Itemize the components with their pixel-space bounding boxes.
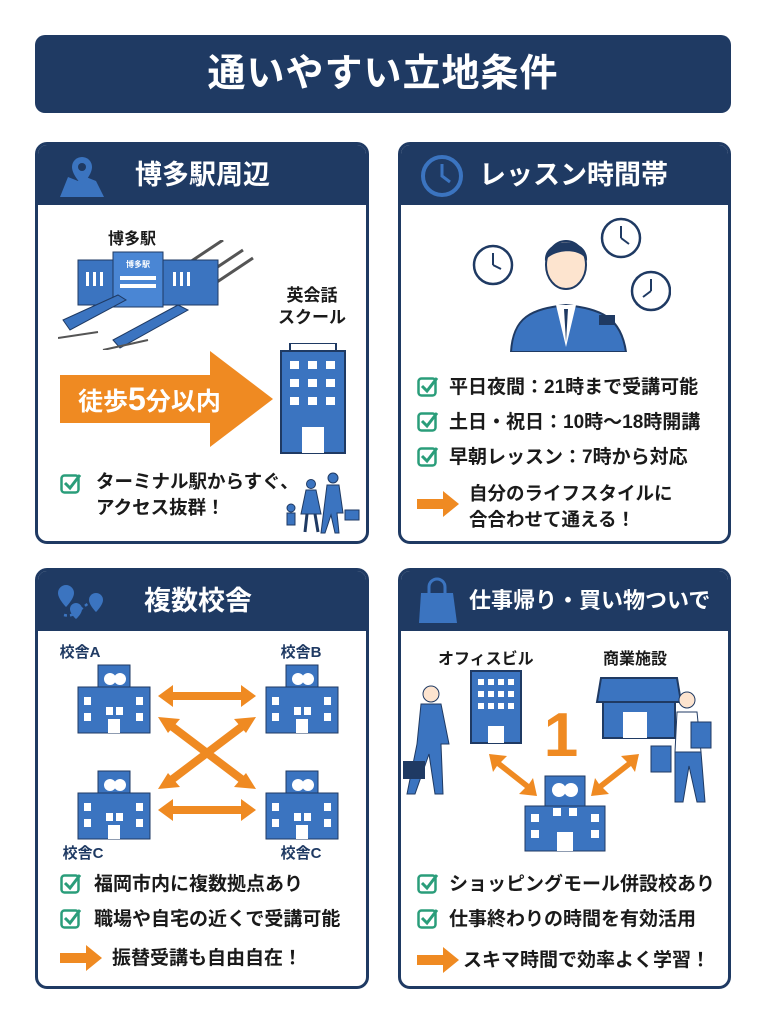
header: 博多駅周辺: 博多駅周辺 xyxy=(135,160,270,190)
icon: school building xyxy=(280,343,346,454)
header: レッスン時間帯: レッスン時間帯 xyxy=(479,160,668,190)
arrow callout: 自分のライフスタイルに xyxy=(469,483,673,504)
header: 仕事帰り・買い物ついで: 仕事帰り・買い物ついで xyxy=(469,588,710,613)
header: レッスン時間帯 xyxy=(401,145,728,205)
illustration: walking family xyxy=(286,472,360,534)
illustration: office, store, people, school: 1 xyxy=(544,701,578,770)
checklist: スキマ時間で効率よく学習！ xyxy=(463,950,710,971)
checklist: 仕事終わりの時間を有効活用 xyxy=(449,909,696,930)
labels: オフィスビル xyxy=(438,651,534,668)
checklist xyxy=(60,874,340,971)
checklist: 福岡市内に複数拠点あり xyxy=(94,874,303,895)
label: 英会話スクール xyxy=(278,286,346,327)
checklist: 平日夜間：21時まで受講可能 xyxy=(449,377,698,398)
panel: 複数校舎 xyxy=(35,568,369,989)
checklist xyxy=(417,874,715,973)
panel: レッスン時間帯 xyxy=(398,142,731,544)
campus buildings and arrows xyxy=(60,643,338,862)
arrow callout xyxy=(417,483,673,530)
checklist item xyxy=(60,471,299,518)
panel: 仕事帰り・買い物ついで xyxy=(398,568,731,989)
illustration: station and trains: 博多駅 xyxy=(126,259,150,269)
header: 仕事帰り・買い物ついで xyxy=(401,571,728,631)
panel: 博多駅周辺 xyxy=(35,142,369,544)
checklist item: ターミナル駅からすぐ、 xyxy=(96,471,299,492)
illustration: businessman and clocks xyxy=(472,218,671,352)
illustration: office, store, people, school xyxy=(403,670,712,852)
arrow: 徒歩5分以内 xyxy=(60,351,273,447)
arrow: 徒歩5分以内: 徒歩5分以内 xyxy=(78,381,221,417)
label: 博多駅: 博多駅 xyxy=(108,231,156,248)
illustration: station and trains xyxy=(58,240,254,350)
campus buildings and arrows: 校舎B xyxy=(281,643,322,661)
checklist: 早朝レッスン：7時から対応 xyxy=(449,447,688,468)
title xyxy=(35,35,731,113)
header: 複数校舎: 複数校舎 xyxy=(144,586,252,616)
checklist xyxy=(417,376,700,468)
checklist: 振替受講も自由自在！ xyxy=(112,948,302,969)
panel: 仕事帰り・買い物ついで: 商業施設 xyxy=(603,651,667,668)
checklist: 土日・祝日：10時〜18時開講 xyxy=(449,412,700,433)
arrow callout: 合合わせて通える！ xyxy=(469,509,635,530)
campus buildings and arrows: 校舎C xyxy=(281,844,322,862)
header: 博多駅周辺 xyxy=(38,145,366,205)
label: 英会話スクール: 英会話 xyxy=(286,286,338,305)
label: 英会話スクール: スクール xyxy=(278,308,346,327)
checklist item: アクセス抜群！ xyxy=(96,497,225,518)
title: 通いやすい立地条件 xyxy=(207,53,558,95)
checklist: ショッピングモール併設校あり xyxy=(449,874,715,895)
campus buildings and arrows: 校舎C xyxy=(63,844,104,862)
checklist: 職場や自宅の近くで受講可能 xyxy=(94,909,340,930)
header: 複数校舎 xyxy=(38,571,366,631)
campus buildings and arrows: 校舎A xyxy=(60,643,101,661)
